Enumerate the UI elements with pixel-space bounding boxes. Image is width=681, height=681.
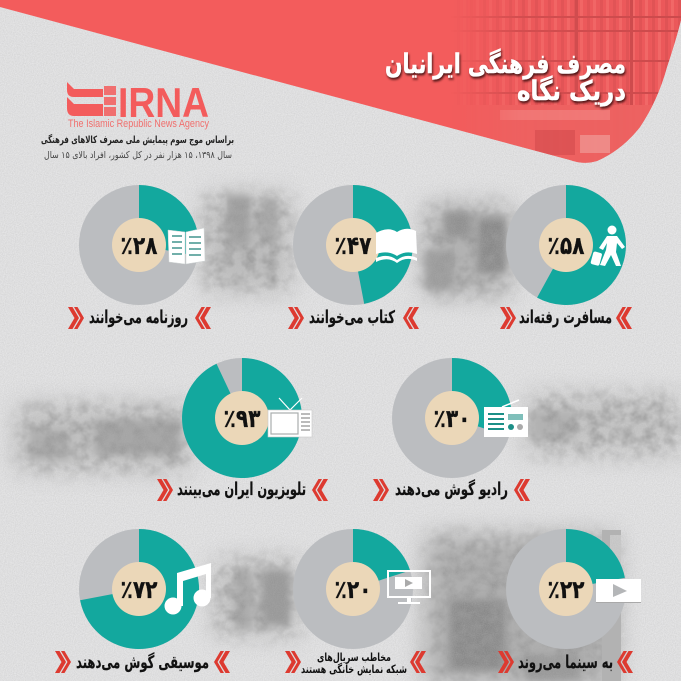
label: رادیو گوش می‌دهند xyxy=(395,479,508,500)
value: ٪۴۷ xyxy=(334,231,372,260)
label: شبکه نمایش خانگی هستند xyxy=(301,662,407,676)
icon: monitor xyxy=(388,571,430,604)
donut chart xyxy=(392,358,512,478)
value: ٪۵۸ xyxy=(548,231,584,260)
value: ٪۳۰ xyxy=(434,404,470,433)
title xyxy=(385,48,626,107)
logo wordmark: IRNA xyxy=(118,79,209,126)
donut chart xyxy=(293,529,413,649)
label: موسیقی گوش می‌دهند xyxy=(76,652,209,673)
background photo collage xyxy=(15,195,681,681)
label xyxy=(68,307,211,329)
icon: radio xyxy=(484,400,528,437)
icon: newspaper xyxy=(168,228,205,264)
label: به سینما می‌روند xyxy=(518,653,613,673)
source text xyxy=(41,133,234,161)
label xyxy=(285,650,426,676)
panel: books 47% xyxy=(288,185,419,329)
icon: open book xyxy=(376,229,417,263)
panel: radio 30% xyxy=(373,358,530,501)
IRNA logo xyxy=(67,79,209,130)
logo tagline: The Islamic Republic News Agency xyxy=(68,118,209,130)
donut chart xyxy=(293,185,413,305)
source text: سال ۱۳۹۸، ۱۵ هزار نفر در کل کشور، افراد بالای ۱۵ سال xyxy=(44,150,232,161)
panel: music 72% xyxy=(55,529,230,673)
value: ٪۲۸ xyxy=(120,231,158,260)
label xyxy=(157,479,328,501)
icon: cinema screen xyxy=(596,579,641,603)
label: تلویزیون ایران می‌بینند xyxy=(177,480,306,500)
label xyxy=(288,307,419,329)
source text: براساس موج سوم پیمایش ملی مصرف کالاهای فرهنگی xyxy=(41,133,234,146)
donut chart xyxy=(79,185,199,305)
donut chart xyxy=(182,358,302,478)
value: ٪۷۲ xyxy=(120,575,158,604)
title: دریک نگاه xyxy=(517,75,626,107)
label xyxy=(373,479,530,501)
panel: home series 20% xyxy=(285,529,430,676)
label xyxy=(498,651,633,673)
value: ٪۹۳ xyxy=(224,404,260,433)
label: روزنامه می‌خوانند xyxy=(89,308,188,328)
icon: music note xyxy=(164,563,211,614)
label xyxy=(55,651,230,673)
panel: newspaper 28% xyxy=(68,185,211,329)
label xyxy=(500,307,632,329)
panel: travel 58% xyxy=(500,185,632,329)
donut chart xyxy=(79,529,199,649)
icon: traveller xyxy=(590,226,625,266)
label: مسافرت رفته‌اند xyxy=(519,308,612,328)
bookshop photo xyxy=(450,0,681,165)
donut chart xyxy=(506,529,626,649)
label: کتاب می‌خوانند xyxy=(309,308,396,328)
panel: cinema 22% xyxy=(498,529,641,673)
label: مخاطب سریال‌های xyxy=(317,650,391,664)
logo dots xyxy=(104,86,116,116)
value: ٪۲۰ xyxy=(334,575,372,604)
header red banner xyxy=(0,0,681,165)
icon: television xyxy=(268,398,312,437)
panel: television 93% xyxy=(157,358,328,501)
value: ٪۲۲ xyxy=(548,575,584,604)
logo wing mark xyxy=(67,82,103,116)
donut chart xyxy=(506,185,626,305)
